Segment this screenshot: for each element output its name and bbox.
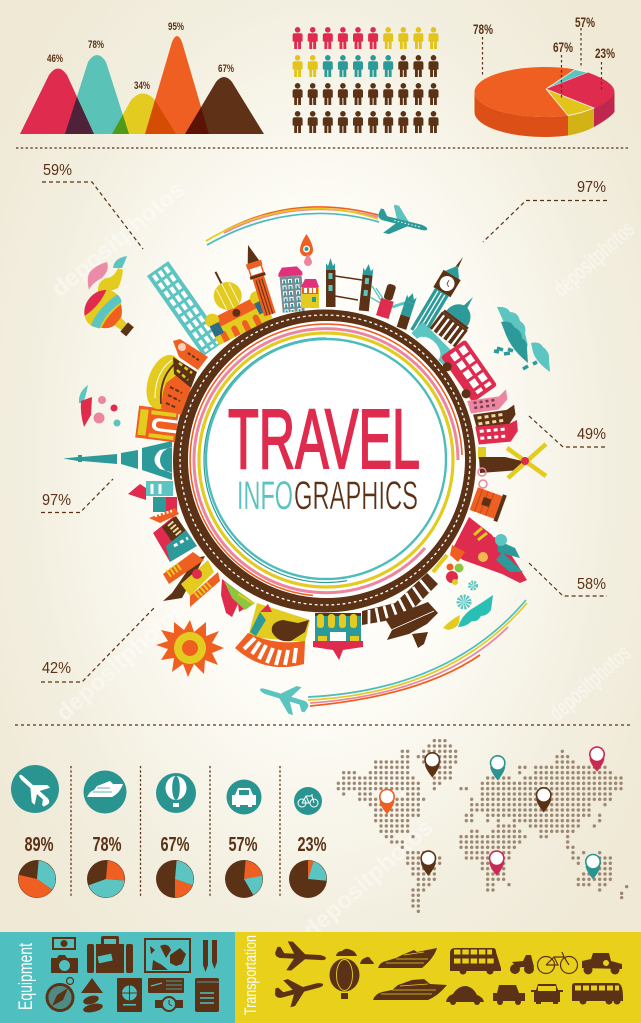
pink cloud	[88, 262, 108, 290]
icon: scooter	[510, 955, 534, 974]
pie labels: 78%	[473, 21, 493, 37]
icon: car circle	[226, 780, 262, 814]
map pins	[379, 746, 605, 879]
bullfight arena	[235, 603, 310, 667]
panel: transportation	[235, 932, 641, 1023]
title TRAVEL: TRAVEL	[228, 392, 420, 486]
callout: 97% right	[483, 179, 607, 242]
icon: shoes	[82, 994, 104, 1014]
icon: car front	[531, 984, 563, 1004]
callout: 42%	[41, 608, 154, 682]
mountain chart	[20, 21, 264, 134]
building: blue and pink house	[278, 266, 306, 313]
stat: 67%: 67%	[160, 834, 190, 856]
landmark: teal bridge	[411, 322, 455, 366]
icon: cruise ship 1	[378, 948, 437, 968]
callout: 49%	[529, 416, 607, 447]
hot air balloon with clouds	[77, 256, 143, 347]
icon: watch	[155, 997, 183, 1011]
pie labels: 23%	[595, 45, 615, 61]
right clouds with rain	[494, 307, 550, 372]
red double-decker bus	[437, 339, 497, 405]
stat: 89%	[18, 834, 56, 898]
watermark: depositphotos	[298, 814, 439, 944]
callout: 97% left: 97%	[42, 492, 71, 509]
stat: 78%	[87, 834, 125, 898]
icon: balloon circle	[156, 773, 196, 813]
monument on plinth	[362, 573, 438, 648]
icon: ticket	[148, 978, 184, 993]
equipment label: Equipment	[16, 942, 37, 1010]
bottom separator	[15, 724, 630, 726]
plane top	[374, 201, 431, 243]
watermark	[47, 176, 640, 944]
icon: jet	[272, 971, 327, 1010]
icon: clouds	[336, 949, 374, 964]
left clouds with hearts	[79, 385, 120, 427]
Dutch houses	[466, 389, 519, 445]
orange row houses and pencil	[163, 552, 220, 607]
callout: 58%	[529, 563, 607, 596]
icon: luggage	[87, 936, 133, 973]
stat: 67%	[156, 834, 194, 898]
icon: ship circle	[84, 770, 126, 814]
mountain labels: 78%	[88, 39, 104, 51]
callout: 97% right: 97%	[577, 179, 606, 196]
people pictogram chart	[293, 27, 438, 133]
subtitle INFOGRAPHICS: INFO	[237, 474, 293, 518]
lipstick	[376, 283, 398, 319]
icon: beetle	[446, 986, 484, 1005]
icon: bicycle	[538, 952, 578, 974]
snowflakes	[460, 583, 476, 606]
icon: cruise ship 2	[373, 979, 447, 1000]
orange hut	[469, 485, 507, 522]
icon: money	[52, 937, 76, 950]
drops	[300, 234, 313, 266]
tree cluster	[433, 555, 464, 585]
mountain labels: 34%	[134, 80, 150, 92]
small townhouses	[128, 481, 179, 523]
icon: passport	[117, 978, 142, 1012]
landmark: domed cathedral	[187, 257, 274, 346]
watermark: depositphotos	[51, 596, 192, 726]
icon: compass	[46, 978, 75, 1012]
main circle	[173, 310, 476, 612]
icon: plane circle	[11, 765, 59, 813]
landmark: campanile	[240, 243, 278, 317]
pie labels: 67%	[553, 39, 573, 55]
stat: 23%: 23%	[298, 834, 327, 856]
stat: 57%: 57%	[228, 834, 258, 856]
landmark: Tower Bridge	[326, 258, 418, 330]
sky rainbow arc top	[206, 207, 379, 245]
subtitle INFOGRAPHICS: GRAPHICS	[294, 474, 418, 518]
icon: map	[144, 938, 191, 973]
icon: balloon	[330, 958, 360, 999]
windmill	[478, 444, 546, 478]
teal and yellow clouds	[443, 595, 493, 630]
balloon	[77, 282, 143, 347]
callout: 59%	[42, 162, 143, 249]
transportation label: Transportation	[241, 935, 260, 1015]
callout: 97% left	[41, 479, 113, 512]
stat: 57%	[225, 834, 263, 898]
sky rainbow arc bottom	[308, 600, 527, 706]
landmark: Big Ben	[409, 252, 472, 338]
icon: double decker	[450, 948, 501, 974]
watermark: depositphotos	[47, 176, 190, 303]
landmark: St Paul's dome	[430, 287, 486, 347]
icon: pens	[203, 940, 217, 972]
pie labels: 57%	[575, 14, 595, 30]
mountain labels	[47, 21, 234, 92]
top separator	[16, 147, 630, 149]
column dividers	[71, 766, 280, 898]
landmark: leaning tower of Pisa	[147, 261, 225, 356]
3D pie chart	[473, 14, 615, 137]
callout: 59%: 59%	[43, 162, 72, 179]
dotted world map	[336, 738, 628, 914]
pie leader lines	[482, 28, 602, 100]
mountain labels: 67%	[218, 63, 234, 75]
subtitle INFOGRAPHICS	[237, 474, 418, 518]
flower market	[221, 579, 255, 617]
building: yellow house	[301, 279, 319, 308]
red and teal corner house	[153, 516, 197, 562]
icon: car side	[493, 985, 525, 1005]
Kremlin-style palace	[450, 517, 527, 583]
callout: 49%: 49%	[577, 426, 606, 443]
icon: notebook	[195, 978, 219, 1012]
road ring	[173, 310, 476, 612]
yellow amphitheatre	[140, 350, 197, 415]
icon: coach	[572, 983, 623, 1004]
triumphal arch	[135, 406, 179, 442]
pink bicycle	[478, 468, 487, 488]
Eiffel tower	[63, 441, 174, 480]
stat: 78%: 78%	[92, 834, 122, 856]
yellow cloud	[98, 268, 123, 292]
stat: 89%: 89%	[24, 834, 54, 856]
icon: bike circle	[294, 787, 322, 815]
icon: camera	[51, 955, 78, 973]
icon: tent	[81, 978, 103, 993]
mountain labels: 46%	[47, 53, 63, 65]
icon: airliner	[274, 941, 327, 972]
stat: 23%	[289, 834, 327, 898]
pie labels	[473, 14, 615, 61]
panel: equipment	[0, 932, 235, 1023]
plane bottom	[256, 676, 313, 719]
sun	[156, 620, 224, 677]
teal cloud	[113, 256, 127, 268]
rainbow rings	[190, 324, 462, 595]
callout: 58%: 58%	[577, 576, 606, 593]
orange pointed house	[173, 339, 208, 370]
callout: 42%: 42%	[42, 660, 71, 677]
colourful house bottom	[313, 613, 363, 660]
mountain labels: 95%	[168, 21, 184, 33]
icon: vintage car	[582, 953, 622, 974]
